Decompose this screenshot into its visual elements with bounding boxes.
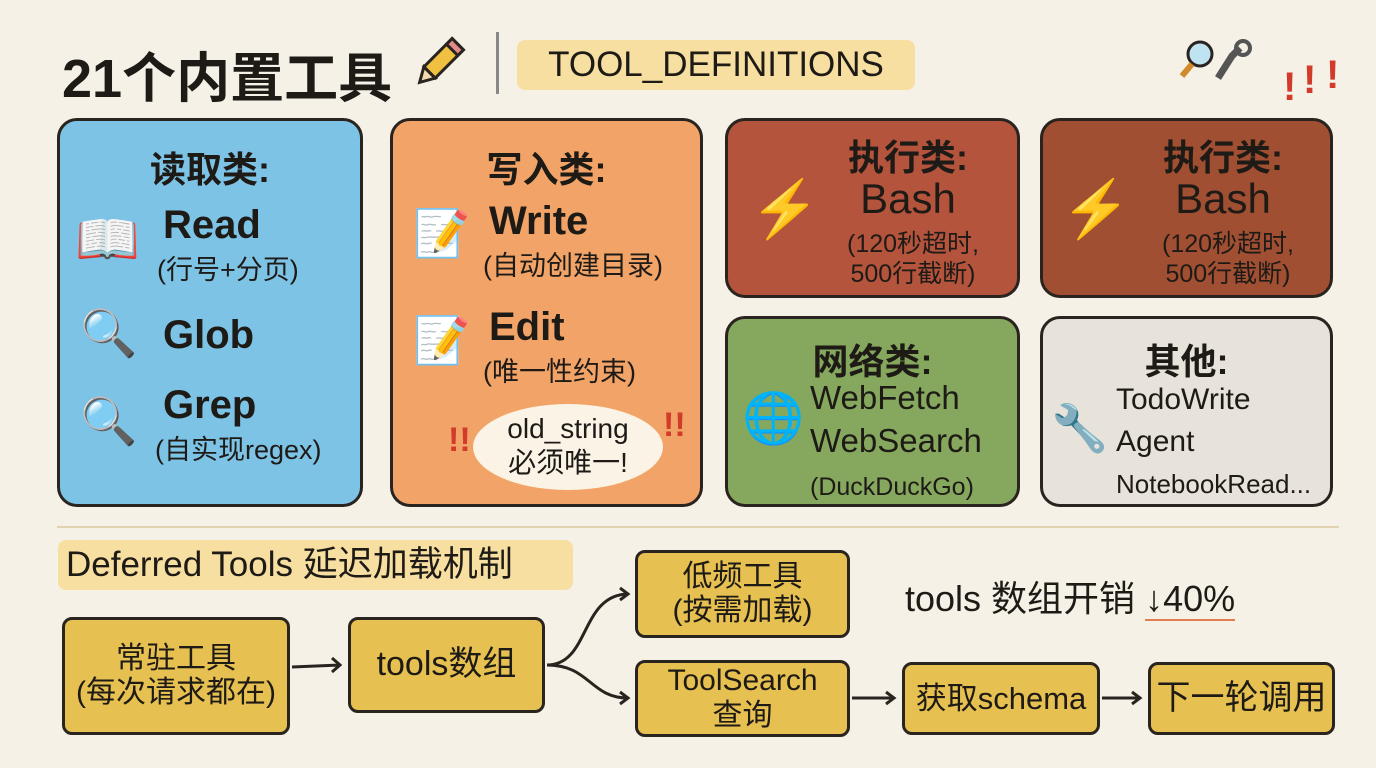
box: low freq: 低频工具 bbox=[682, 560, 802, 592]
item: Grep bbox=[155, 383, 322, 465]
panel: exec 2 bbox=[1040, 118, 1333, 298]
item: Read: Read bbox=[163, 203, 261, 247]
text: exec: 执行类: bbox=[848, 137, 968, 178]
heading: read: 读取类: bbox=[150, 149, 270, 190]
text: exec 2: Bash bbox=[1175, 175, 1271, 222]
item: Glob: Glob bbox=[163, 313, 254, 357]
panel: write bbox=[390, 118, 703, 507]
heading: deferred tools: Deferred Tools 延迟加载机制 bbox=[66, 545, 513, 584]
box: low freq: (按需加载) bbox=[672, 594, 812, 627]
panel: exec 2: 500行截断) bbox=[1165, 260, 1291, 288]
item: Grep: (自实现regex) bbox=[155, 435, 322, 465]
icon: edit: 📝 bbox=[413, 207, 470, 259]
icon: lightning yellow: ⚡ bbox=[1061, 177, 1131, 240]
callout: old_string: old_string bbox=[507, 413, 629, 444]
stat: overhead: tools 数组开销 ↓40% bbox=[905, 578, 1235, 619]
text: web tools: (DuckDuckGo) bbox=[810, 473, 974, 501]
item: Read: (行号+分页) bbox=[157, 255, 299, 285]
item: Edit bbox=[483, 305, 636, 387]
title: TOOL_DEFINITIONS: TOOL_DEFINITIONS bbox=[548, 45, 884, 84]
icon: wrench: 🔧 bbox=[1051, 402, 1108, 454]
text: web tools: WebSearch bbox=[810, 422, 982, 459]
box: low freq bbox=[635, 550, 850, 638]
box: next round bbox=[1148, 662, 1335, 735]
panel: write: !! bbox=[663, 406, 686, 444]
heading: write: 写入类: bbox=[486, 149, 606, 190]
item: Grep: Grep bbox=[163, 383, 256, 427]
text: web tools bbox=[810, 379, 982, 501]
icon: lightning: ⚡ bbox=[750, 177, 820, 240]
text: other tools: Agent bbox=[1116, 425, 1194, 458]
icon: magnifier 2: 🔍 bbox=[80, 395, 137, 447]
box: resident tools: 常驻工具 bbox=[116, 642, 236, 674]
item: Write: Write bbox=[489, 199, 588, 243]
box: resident tools: (每次请求都在) bbox=[76, 676, 276, 709]
box: toolsearch: ToolSearch bbox=[667, 664, 818, 697]
text: web tools: WebFetch bbox=[810, 379, 960, 416]
item: Edit: Edit bbox=[489, 305, 565, 349]
icon: globe: 🌐 bbox=[742, 390, 804, 446]
heading: deferred tools bbox=[58, 540, 573, 590]
item: Edit: (唯一性约束) bbox=[483, 357, 636, 387]
panel: other bbox=[1040, 316, 1333, 507]
item: Read bbox=[157, 203, 299, 285]
text: other tools: TodoWrite bbox=[1116, 383, 1251, 416]
panel: exec 1: 500行截断) bbox=[850, 260, 976, 288]
text: exec: Bash bbox=[860, 175, 956, 222]
text: exec 2 bbox=[1163, 137, 1283, 222]
item: Write: (自动创建目录) bbox=[483, 251, 663, 281]
box: toolsearch bbox=[635, 660, 850, 737]
icons: top right: ! bbox=[1326, 53, 1339, 97]
box: get schema bbox=[902, 662, 1100, 735]
callout: old_string: 必须唯一! bbox=[508, 447, 628, 478]
title: TOOL_DEFINITIONS bbox=[517, 40, 915, 90]
text: other tools bbox=[1116, 383, 1311, 499]
icons: top right: ! bbox=[1283, 65, 1296, 108]
box: tools array: tools数组 bbox=[377, 645, 516, 683]
heading: network: 网络类: bbox=[812, 341, 932, 382]
icon: edit 2: 📝 bbox=[413, 314, 470, 366]
panel: exec 2: (120秒超时, bbox=[1162, 230, 1294, 258]
panel: read bbox=[57, 118, 363, 507]
panel: exec 1 bbox=[725, 118, 1020, 298]
box: toolsearch: 查询 bbox=[712, 698, 772, 732]
panel: exec 1: (120秒超时, bbox=[847, 230, 979, 258]
box: get schema: 获取schema bbox=[916, 681, 1086, 716]
text: other tools: NotebookRead... bbox=[1116, 469, 1311, 499]
box: next round: 下一轮调用 bbox=[1156, 679, 1326, 717]
icon: magnifier: 🔍 bbox=[80, 307, 137, 359]
box: tools array bbox=[348, 617, 545, 713]
icon: book: 📖 bbox=[75, 211, 140, 269]
icons: top right bbox=[1180, 39, 1339, 108]
icons: top right: ! bbox=[1303, 58, 1316, 102]
panel: network bbox=[725, 316, 1020, 507]
panel: write: !! bbox=[448, 421, 471, 459]
heading: other: 其他: bbox=[1144, 341, 1228, 382]
box: resident tools bbox=[62, 617, 290, 735]
text: exec 2: 执行类: bbox=[1163, 137, 1283, 178]
text: exec bbox=[848, 137, 968, 222]
item: Write bbox=[483, 199, 663, 281]
title: 21个内置工具 bbox=[62, 49, 392, 109]
icon: pencil bbox=[418, 36, 466, 84]
callout: old_string bbox=[473, 404, 663, 490]
